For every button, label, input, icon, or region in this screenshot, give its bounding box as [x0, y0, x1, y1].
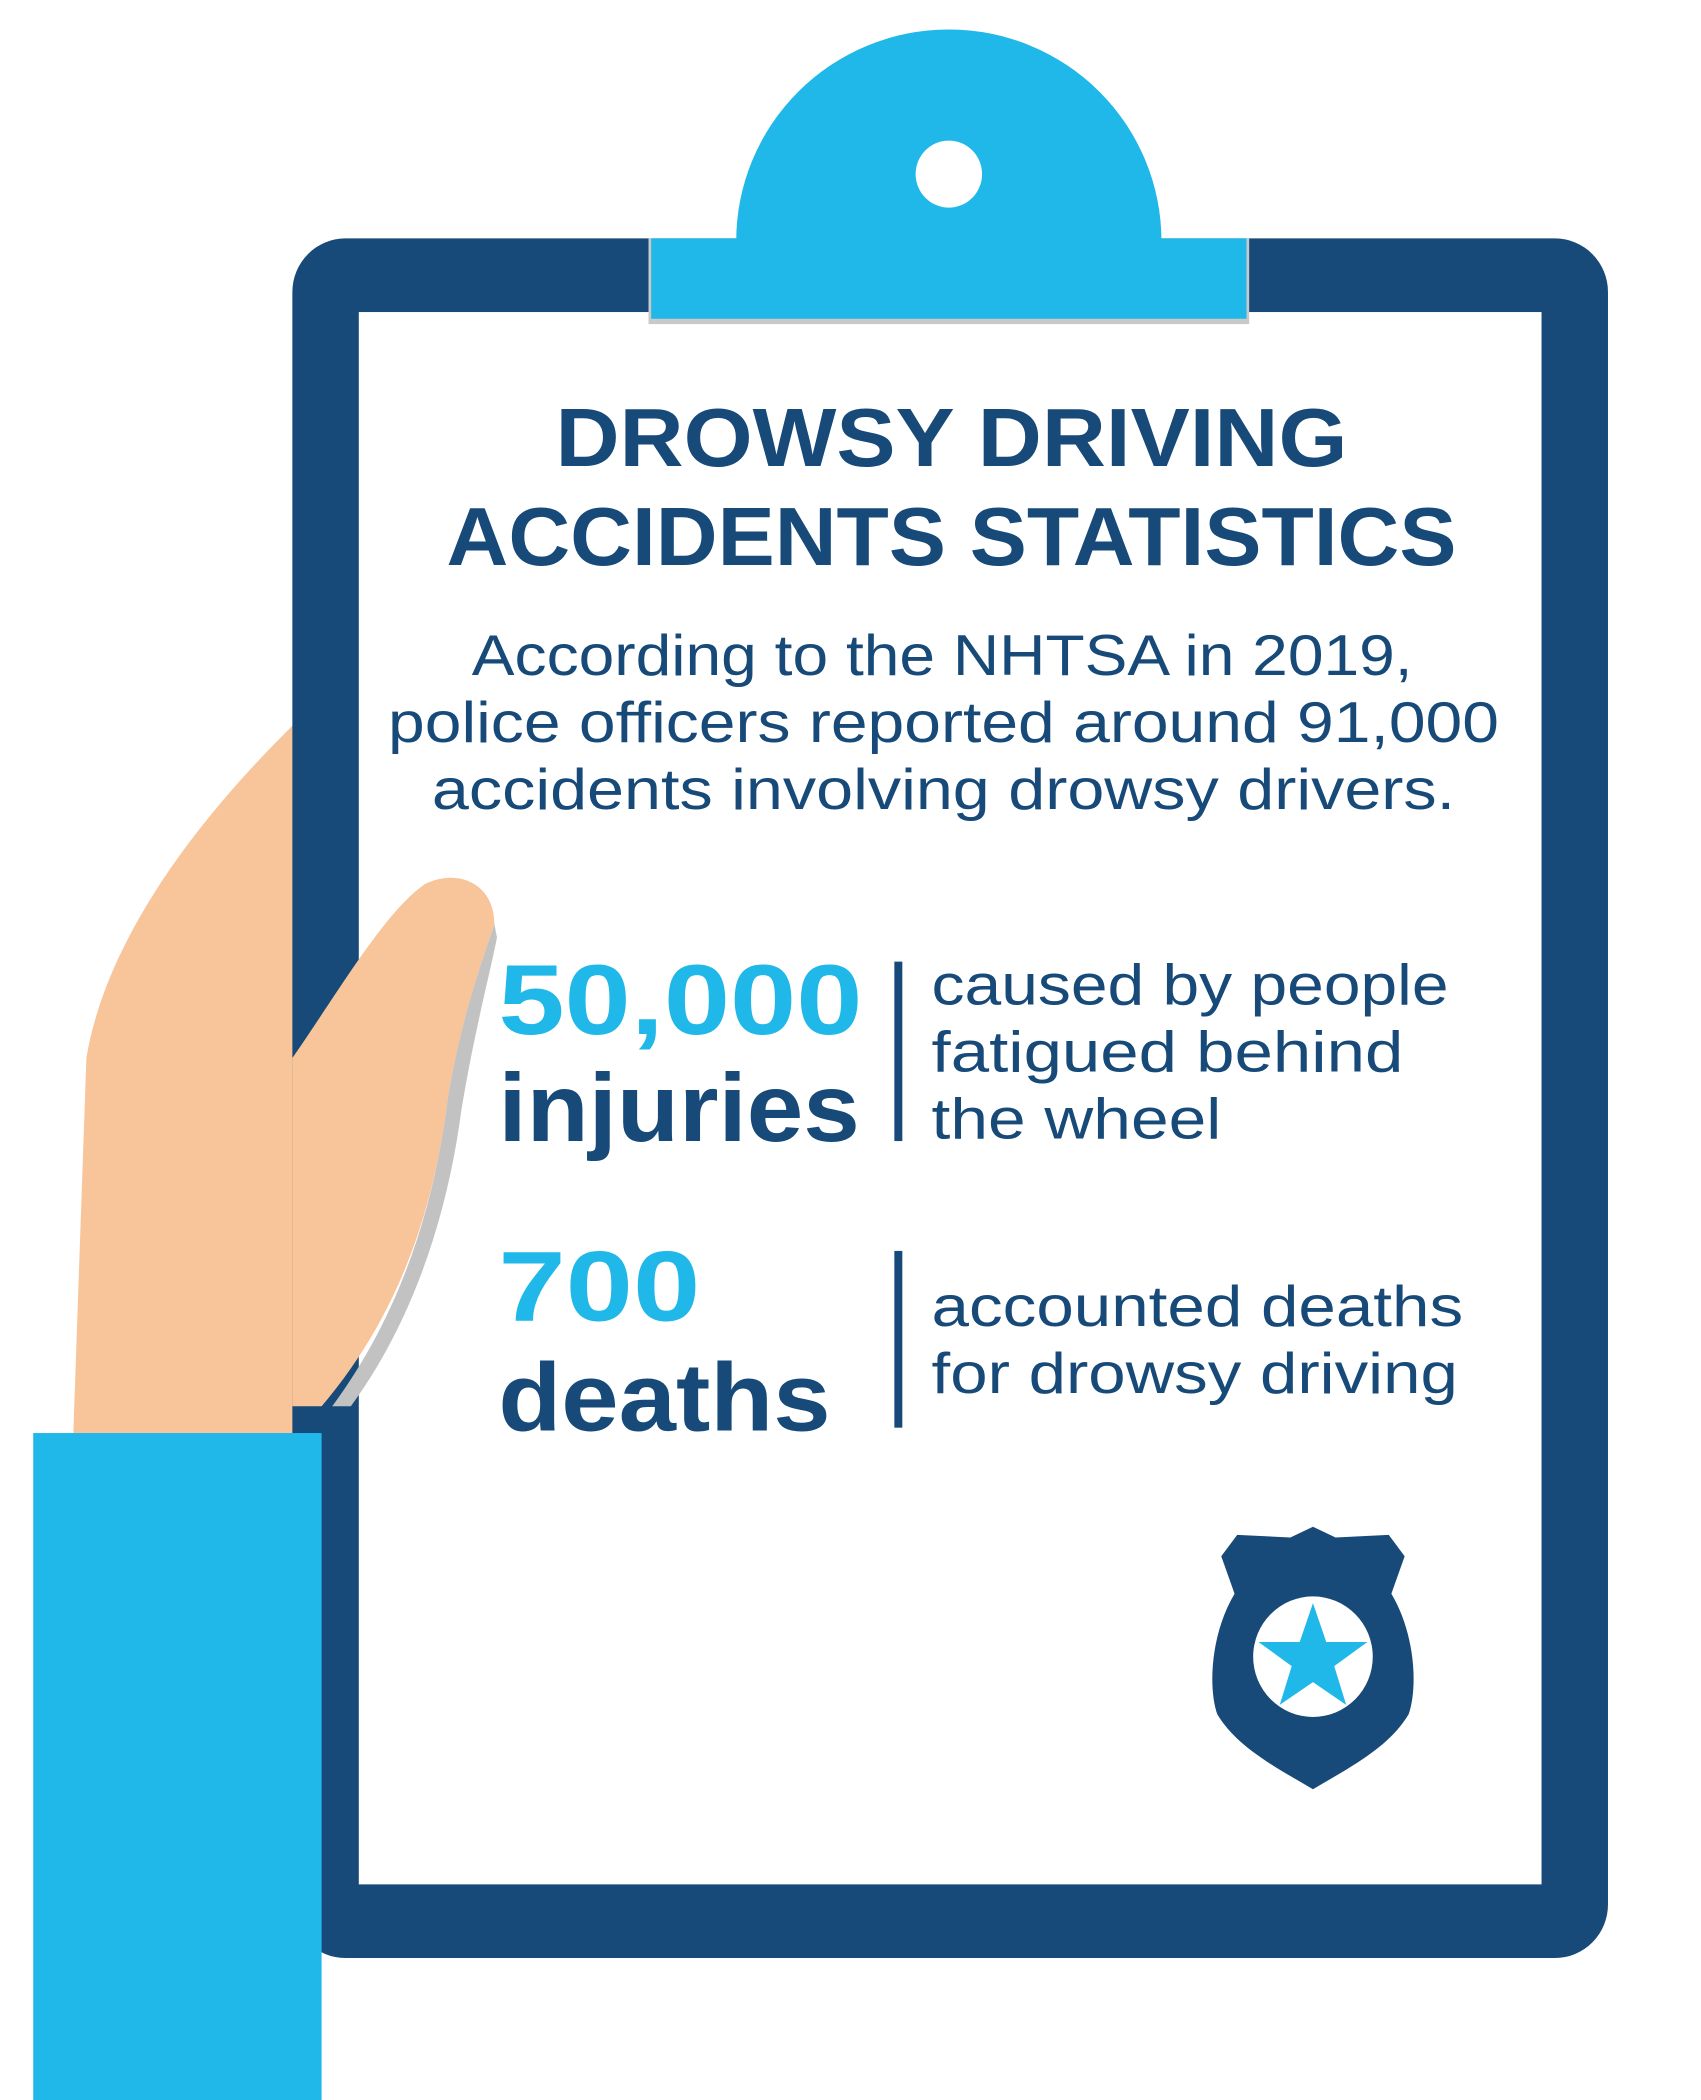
stat: deaths: for drowsy driving — [932, 1342, 1458, 1406]
stat: deaths — [498, 1231, 1463, 1451]
stat: deaths: 700 — [498, 1231, 700, 1342]
stat: deaths: accounted deaths — [932, 1275, 1463, 1339]
subtitle — [388, 624, 1499, 822]
icon: police badge — [1212, 1527, 1414, 1789]
title: ACCIDENTS STATISTICS — [447, 490, 1456, 583]
title — [447, 391, 1456, 583]
subtitle: police officers reported around 91,000 — [388, 691, 1499, 755]
stat: injuries — [498, 945, 1449, 1162]
subtitle: According to the NHTSA in 2019, — [472, 624, 1413, 688]
stat: injuries: 50,000 — [498, 945, 862, 1055]
subtitle: accidents involving drowsy drivers. — [432, 758, 1455, 822]
stat: injuries: caused by people — [932, 953, 1449, 1018]
stat: injuries: fatigued behind — [932, 1020, 1403, 1084]
sleeve — [33, 1433, 322, 2100]
hand — [73, 723, 493, 1440]
stat: injuries: injuries — [498, 1055, 860, 1162]
thumb over board — [292, 878, 497, 1406]
clip — [649, 29, 1249, 324]
title: DROWSY DRIVING — [555, 391, 1348, 484]
stat: injuries: the wheel — [932, 1087, 1221, 1151]
stat: deaths: deaths — [498, 1344, 831, 1451]
clipboard board — [292, 238, 1608, 1958]
